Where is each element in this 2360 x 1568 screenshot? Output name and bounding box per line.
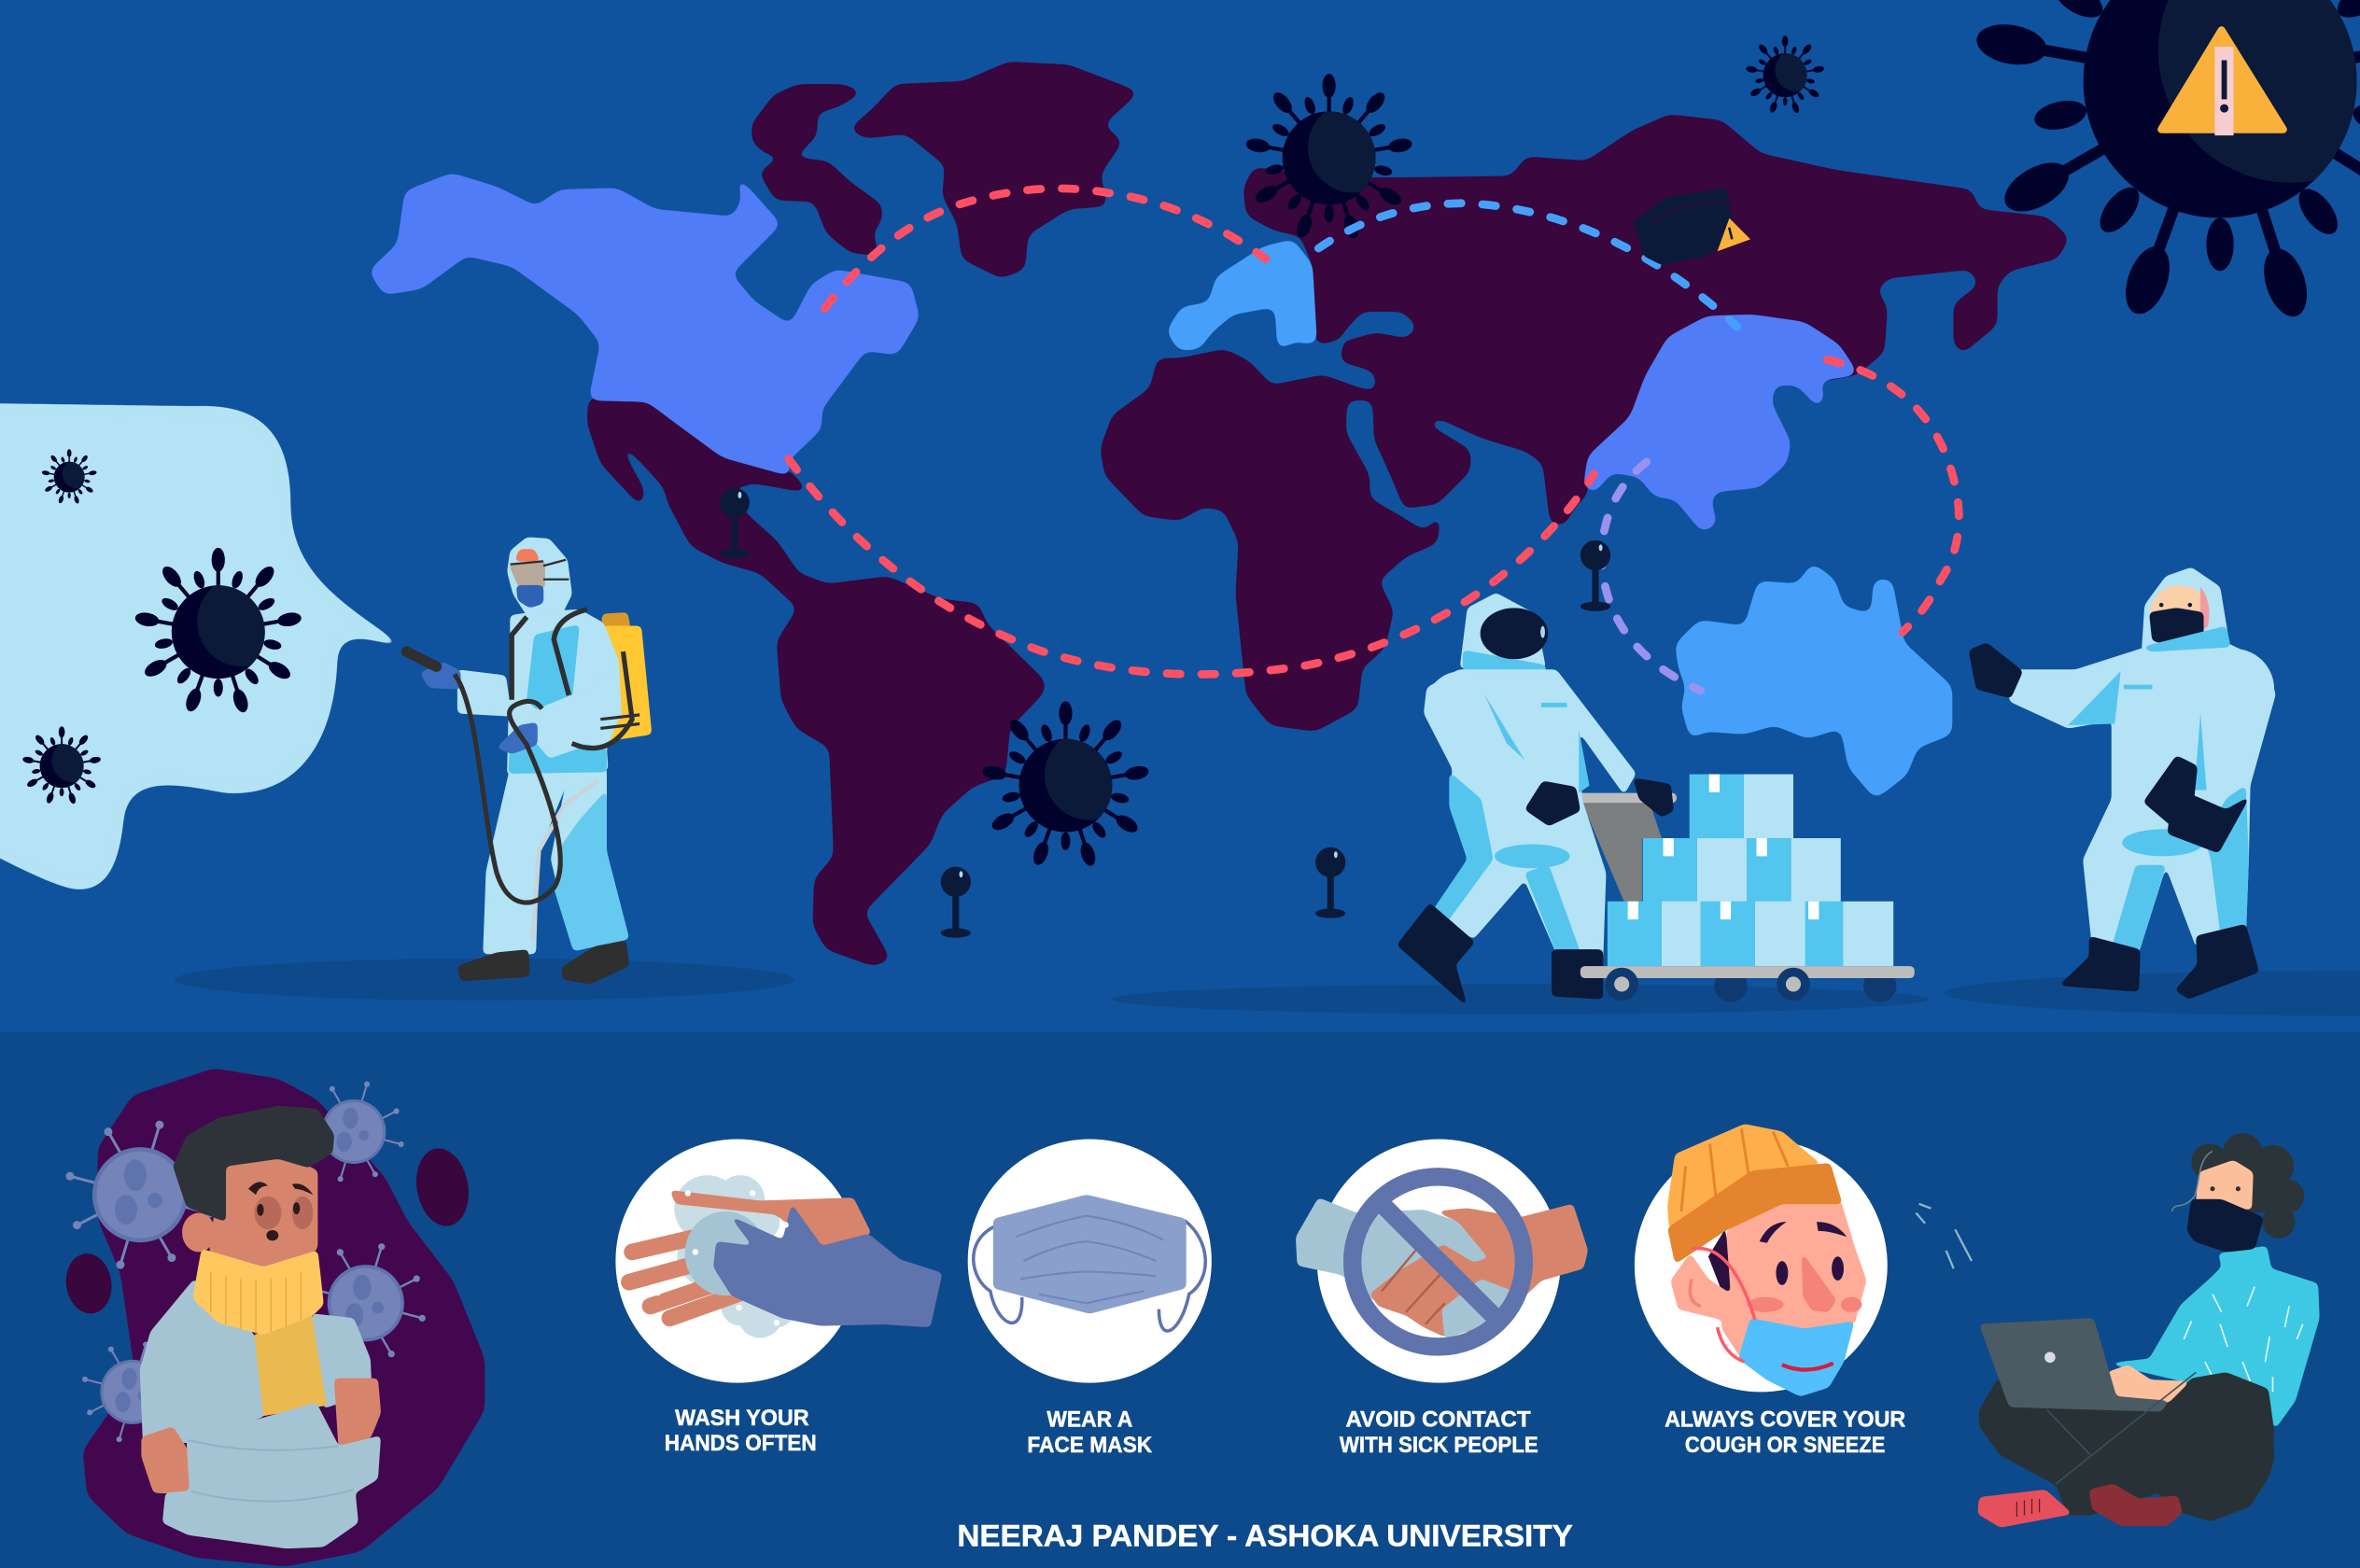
smile	[1782, 1364, 1833, 1370]
landmass: China highlighted	[1583, 315, 1859, 533]
landmass: purple unaffected continents	[587, 62, 2070, 966]
dashed route: north Atlantic red	[825, 189, 1266, 309]
face mask	[2149, 608, 2203, 646]
gloves	[420, 662, 538, 754]
red shoe	[1977, 1490, 2072, 1527]
prevention: wash your hands	[615, 1139, 942, 1383]
suit	[1424, 593, 1637, 960]
dashed route: Eurasia blue	[1318, 203, 1737, 327]
cart handle and panel	[1574, 793, 1677, 902]
icon: warning triangle	[2161, 30, 2283, 135]
glove	[1969, 642, 2023, 698]
ground shadow: clipboard worker	[1945, 971, 2360, 1015]
orange hand	[1370, 1204, 1588, 1337]
map pin: Central America	[720, 487, 750, 558]
hat crown	[1667, 1124, 1821, 1229]
ear detail	[1690, 1279, 1701, 1306]
sneeze marks	[1916, 1204, 1972, 1268]
cart with boxes	[1580, 775, 1915, 1002]
illustration: sick man with viruses	[63, 1069, 485, 1566]
finger lines	[1382, 1237, 1453, 1324]
map pin: South Atlantic	[941, 867, 971, 938]
platform	[1580, 966, 1915, 978]
accent blob right	[411, 1144, 474, 1230]
large wheels	[1605, 968, 1810, 1001]
scarf	[192, 1249, 324, 1335]
eyes, brows and mouth	[248, 1182, 313, 1240]
virus: South America	[981, 701, 1150, 868]
virus: large top right	[1974, 0, 2360, 322]
prohibition sign	[1353, 1177, 1524, 1347]
soap foam	[674, 1175, 794, 1337]
eyes and brows	[1760, 1222, 1847, 1285]
face	[2196, 1160, 2254, 1210]
hat ribs	[1681, 1128, 1788, 1211]
backpack buckles	[600, 715, 639, 728]
landmass: Europe highlighted	[1166, 239, 1317, 351]
virus: Europe	[1244, 74, 1413, 240]
caption: wear a face mask: FACE MASK	[1027, 1433, 1153, 1458]
virus: lower left	[82, 1342, 183, 1442]
dashed route: Pacific red	[1827, 359, 1959, 632]
coat panels	[140, 1279, 265, 1443]
caption: wash your hands often: WASH YOUR	[675, 1406, 809, 1431]
hair sliver	[1708, 1229, 1738, 1303]
caption: wash your hands often	[665, 1406, 817, 1456]
person: sprayer in protective suit	[406, 538, 652, 984]
ground shadow: sprayer	[175, 959, 794, 1001]
trousers	[1979, 1372, 2274, 1521]
sleeve and pale hand	[1296, 1197, 1490, 1302]
prevention: wear a face mask	[968, 1139, 1212, 1383]
hood	[2142, 567, 2230, 651]
caption: always cover your cough or sneeze: ALWAYS COVER YOUR	[1665, 1407, 1905, 1432]
caption: wash your hands often: HANDS OFTEN	[665, 1431, 817, 1456]
virus: right	[306, 1243, 426, 1363]
sweater	[2107, 1246, 2319, 1428]
helmet visor	[1481, 608, 1548, 659]
background: lower prevention band	[0, 1032, 2360, 1568]
hat band	[1667, 1163, 1842, 1264]
face	[1671, 1201, 1866, 1364]
hood and face	[507, 538, 572, 615]
man figure	[140, 1106, 381, 1548]
face	[2151, 585, 2209, 637]
caption: always cover your cough or sneeze: COUGH OR SNEEZE	[1685, 1433, 1885, 1458]
soapy palm	[685, 1211, 766, 1295]
caption: wear a face mask	[1027, 1407, 1153, 1458]
map pin: Africa south	[1315, 847, 1345, 918]
hair	[173, 1106, 334, 1222]
spray cloud with viruses	[0, 403, 415, 889]
hand	[2107, 1365, 2190, 1403]
dashed route: Australia purple	[1601, 462, 1701, 691]
face	[209, 1155, 317, 1268]
accent blob left	[63, 1251, 116, 1317]
left glove	[1524, 781, 1580, 826]
white circle	[968, 1139, 1212, 1383]
left hand	[142, 1426, 192, 1494]
purple backdrop blob	[83, 1069, 485, 1566]
caption: always cover your cough or sneeze	[1665, 1407, 1905, 1458]
background: upper map section	[0, 0, 2360, 1034]
landmass: Australia highlighted	[1675, 563, 1952, 799]
white circle	[1635, 1139, 1888, 1392]
crossed leg line	[2047, 1372, 2196, 1484]
icon: mask with warning over Russia	[1633, 189, 1750, 265]
eyes	[2210, 1186, 2241, 1191]
boxes	[1608, 775, 1893, 966]
gloved hand	[713, 1204, 942, 1327]
laptop	[1979, 1318, 2169, 1411]
white circle	[1317, 1139, 1561, 1383]
face mask	[2187, 1199, 2264, 1252]
hair	[2191, 1133, 2304, 1239]
right glove	[1633, 778, 1674, 817]
suit legs	[484, 767, 629, 954]
virus: upper left	[65, 1121, 214, 1269]
eye bags	[254, 1197, 281, 1229]
boots	[1397, 903, 1603, 1007]
hair wisp	[2171, 1151, 2212, 1211]
right hand	[334, 1379, 381, 1448]
virus: spray small top	[41, 449, 97, 504]
person: worker with clipboard	[1969, 567, 2276, 1000]
dashed route: southern red	[789, 459, 1594, 674]
hose	[455, 651, 632, 903]
ear loops	[974, 1221, 1205, 1331]
virus: small top	[1746, 35, 1824, 114]
folded arms	[162, 1403, 381, 1548]
suit torso and arm	[457, 609, 622, 775]
caption: wear a face mask: WEAR A	[1047, 1407, 1132, 1432]
nose and cheeks	[1748, 1252, 1861, 1312]
spray cloud shape	[0, 403, 415, 889]
dark red shoe	[2089, 1484, 2183, 1526]
prevention: avoid contact	[1296, 1139, 1588, 1383]
bare hand arm	[669, 1190, 871, 1248]
ground shadow: cart worker	[1111, 984, 1930, 1015]
caption: avoid contact with sick people: WITH SICK PEOPLE	[1340, 1433, 1538, 1458]
virus: spray large	[134, 548, 302, 714]
illustration: person on laptop	[1916, 1133, 2319, 1527]
person: worker pushing cart	[1397, 593, 1677, 1007]
white circle	[615, 1139, 860, 1383]
mask	[993, 1195, 1186, 1314]
sprayer nozzle	[406, 651, 437, 666]
world map	[369, 62, 2070, 966]
mask strap	[1692, 1248, 1755, 1362]
backpack	[602, 612, 652, 742]
virus: upper right	[303, 1082, 404, 1182]
map pin: Indian Ocean	[1580, 540, 1610, 611]
caption: avoid contact with sick people	[1340, 1407, 1538, 1458]
virus: spray small bottom	[22, 726, 101, 805]
boots	[2059, 924, 2259, 1000]
sweater	[254, 1314, 327, 1416]
clipboard	[2143, 755, 2250, 853]
pleats	[1016, 1216, 1163, 1303]
sparkles	[654, 1190, 789, 1325]
pale thumb	[1442, 1279, 1512, 1339]
fingers	[629, 1231, 738, 1318]
harness straps	[512, 609, 587, 700]
credit line: NEERAJ PANDEY - ASHOKA UNIVERSITY	[957, 1519, 1573, 1553]
landmass: North America highlighted	[369, 170, 920, 477]
mask	[1738, 1318, 1854, 1396]
sweater flecks	[2184, 1286, 2303, 1392]
prevention: cover cough or sneeze	[1635, 1124, 1888, 1396]
caption: avoid contact with sick people: AVOID CONTACT	[1345, 1407, 1531, 1432]
suit	[2009, 626, 2276, 953]
boots	[457, 941, 629, 984]
small wheels	[1714, 969, 1896, 1002]
